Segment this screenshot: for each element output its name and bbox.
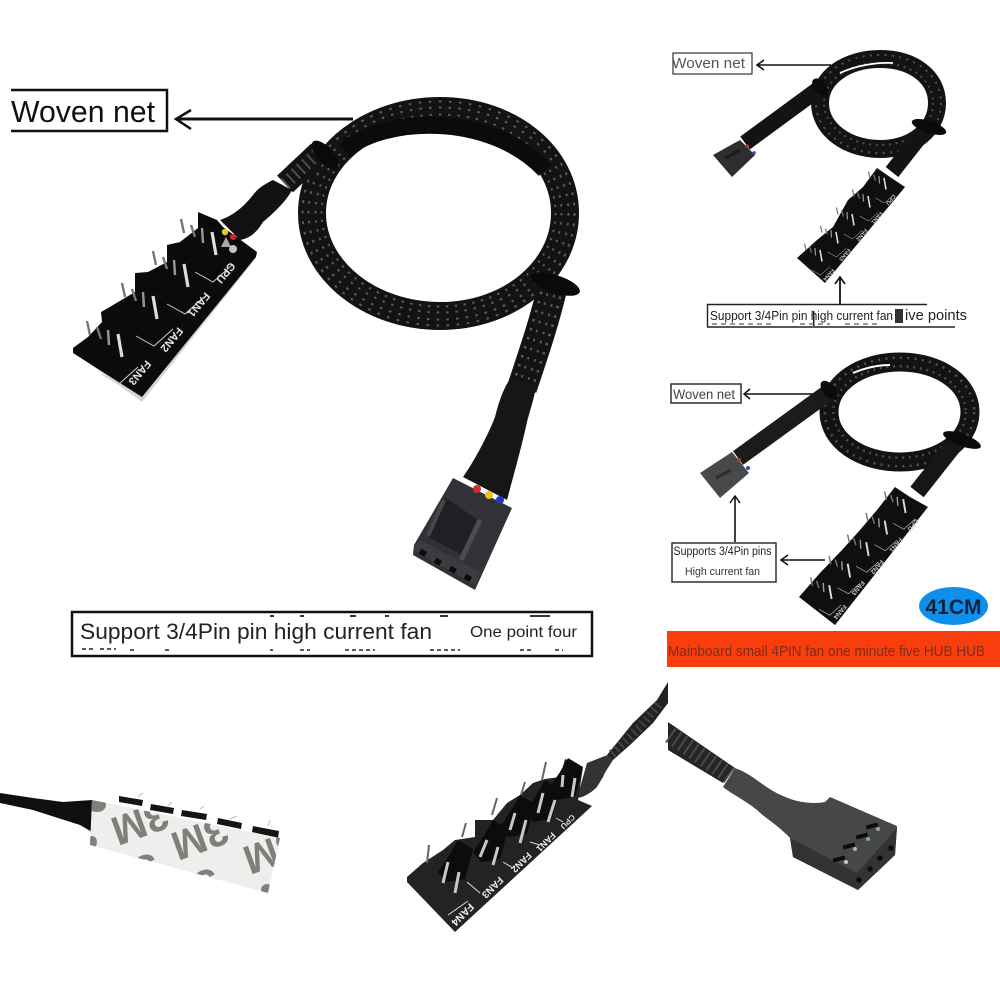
heat-shrink to board [220,180,292,240]
hub board [799,487,928,625]
connector with shrink tube [723,768,897,890]
3M logos on tape [90,800,280,893]
banner: red title [667,631,1000,667]
panel: 3M adhesive back photo [0,792,280,893]
header tips [119,793,279,838]
braided cable [607,682,668,760]
label: Support 3/4Pin [72,612,592,656]
hub board: FAN1 [185,290,212,319]
hub board: FAN4 [821,267,835,282]
fan connector with tapered shrink tube [413,382,537,590]
arrow: to board [835,277,845,304]
hub board: FAN2 [508,849,533,874]
label: Supports 3/4Pin pins: High current fan [685,566,760,578]
hub board: CPU [558,812,577,831]
braided cable [668,722,735,783]
hub board: FAN2 [868,558,885,576]
hub board: FAN4 [448,901,476,928]
label: Supports 3/4Pin pins [672,543,776,582]
shrink tube [577,755,613,798]
banner: red title: Mainboard small 4PIN fan one minute five HUB HUB [668,644,985,660]
4-pin connector [700,452,750,498]
badge: 41CM [919,587,988,625]
hub board: FAN1 [869,210,883,225]
panel: main product photo [11,90,592,656]
label: Support five points [708,304,967,327]
hub board: FAN1 [887,536,904,554]
hub board: FAN2 [158,325,185,354]
arrow: to board [781,555,825,565]
label: Support five points: Support 3/4Pin pin high current fan [710,309,893,323]
hub board: FAN4 [831,603,848,621]
panel: top-right photo [672,53,967,327]
cable loop [738,362,983,492]
hub board [73,212,257,402]
hub board: CPU [905,517,920,532]
hub board: CPU [213,260,237,285]
label: Woven net: Woven net [673,387,735,402]
hub board: FAN2 [854,227,868,242]
hub board: FAN3 [126,358,153,387]
3M logos on tape: 3M [165,807,235,869]
arrow: woven net [744,389,813,399]
label: Support 3/4Pin: Support 3/4Pin pin high current fan [80,619,432,644]
label: Support five points: ive points [905,307,967,324]
hub board: CPU [884,193,896,206]
hub board: FAN1 [534,830,558,854]
hub board: FAN3 [837,247,851,262]
label: Support 3/4Pin: One point four [470,624,578,641]
cable loop [745,59,948,172]
panel: board close-up photo [407,682,668,932]
label: Supports 3/4Pin pins: Supports 3/4Pin pins [674,546,772,558]
3M logos on tape: 3M [105,792,175,854]
cable [0,793,92,832]
label: Woven net: Woven net [11,94,155,129]
hub board: FAN3 [479,874,505,900]
panel: middle-right photo [667,362,1000,667]
hub board: FAN3 [849,579,866,597]
hub board [797,168,905,283]
3M logos on tape: 3 [188,858,226,910]
braided cable loop [285,111,583,388]
4-pin connector [713,140,756,177]
arrow: to braided sleeve [176,110,353,129]
3M logos on tape: 3M [237,821,307,883]
arrow: woven net [757,60,831,70]
badge: 41CM: 41CM [926,596,982,619]
hub board [407,758,592,932]
3M logos on tape: 3 [128,843,166,895]
panel: connector close-up photo [668,722,897,890]
white tape backing [90,800,280,893]
arrow: to connector [730,496,740,542]
label: Woven net small: Woven net [672,55,746,72]
